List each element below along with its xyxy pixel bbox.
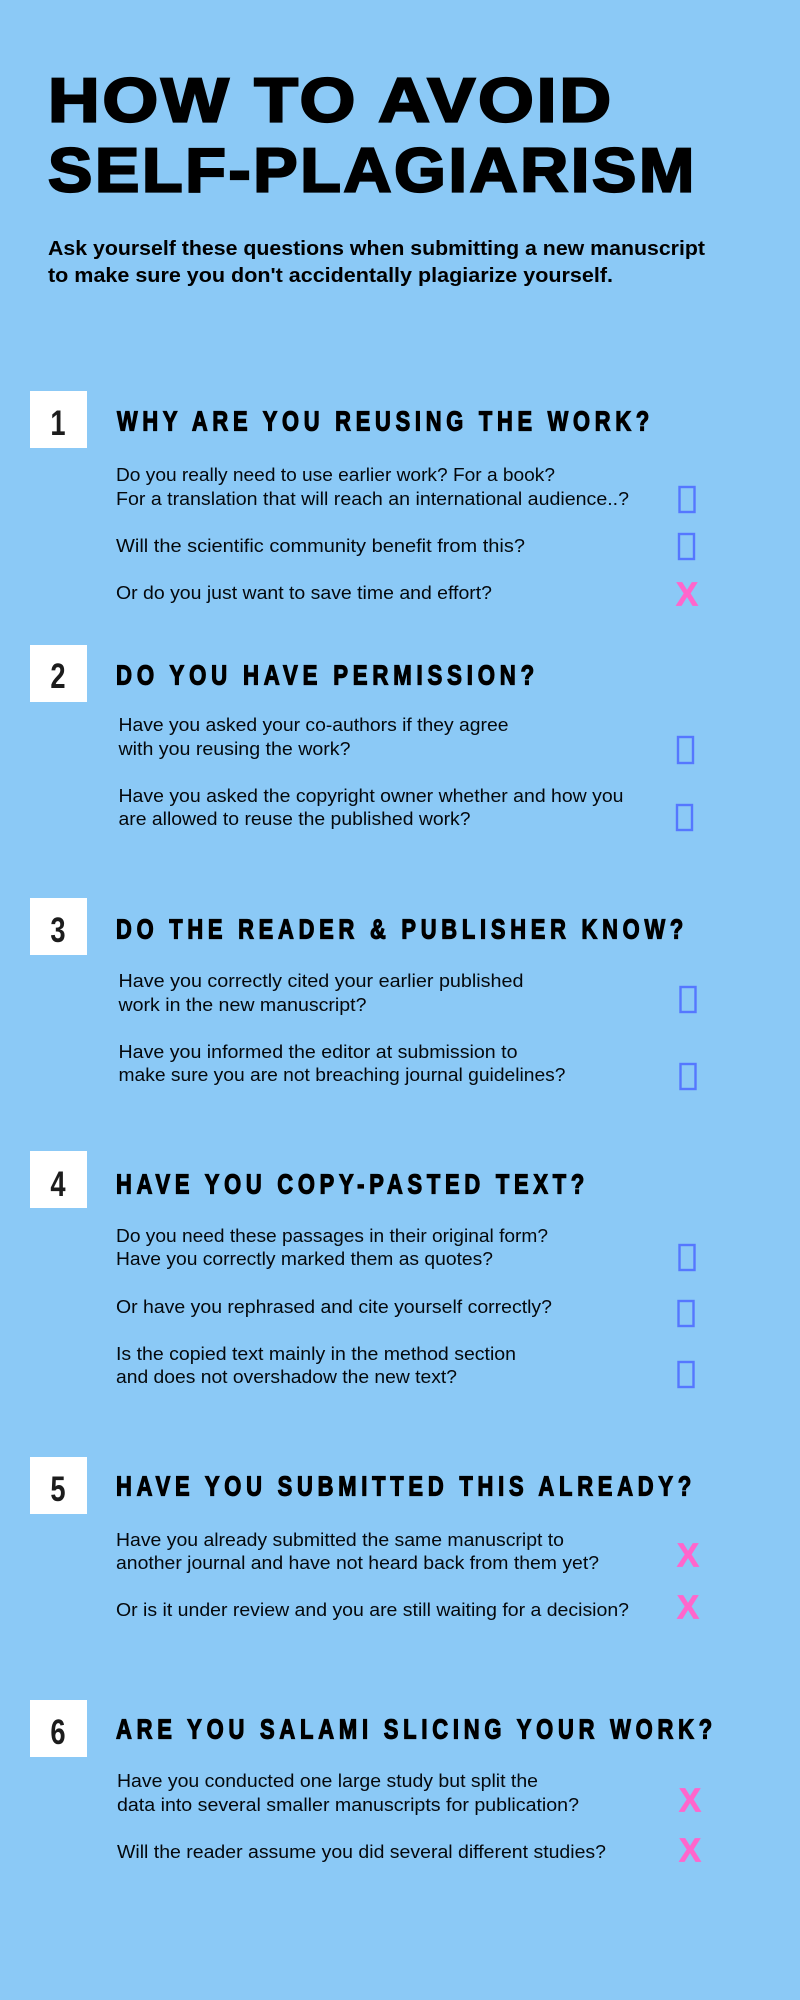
question 1a: For a translation that will reach an international audience..? bbox=[116, 488, 629, 509]
number badge 6 bbox=[30, 1700, 87, 1757]
number badge 1: 1 bbox=[50, 404, 66, 443]
icon: cross: X bbox=[679, 1782, 701, 1818]
icon: missing glyph box bbox=[678, 737, 693, 763]
question 1a: Do you really need to use earlier work? For a book? bbox=[116, 464, 555, 485]
question 2b: Have you asked the copyright owner whether and how you bbox=[118, 785, 624, 806]
subtitle bbox=[48, 237, 705, 287]
panel: section 5 bbox=[30, 1457, 699, 1626]
icon: missing glyph box bbox=[680, 1245, 694, 1270]
icon: missing glyph box bbox=[680, 487, 694, 512]
question 3b: Have you informed the editor at submission to bbox=[118, 1041, 518, 1062]
title: SELF-PLAGIARISM bbox=[48, 136, 697, 206]
question 2a: with you reusing the work? bbox=[117, 738, 350, 759]
question 5a: another journal and have not heard back from them yet? bbox=[116, 1552, 599, 1573]
subtitle: Ask yourself these questions when submitting a new manuscript bbox=[48, 237, 705, 260]
question 4c: and does not overshadow the new text? bbox=[116, 1366, 457, 1387]
question 4a: Do you need these passages in their original form? bbox=[116, 1225, 548, 1246]
icon: missing glyph box bbox=[677, 805, 692, 830]
question 4c: Is the copied text mainly in the method section bbox=[116, 1343, 516, 1364]
panel: section 3 bbox=[30, 898, 696, 1089]
title: HOW TO AVOID bbox=[48, 66, 614, 136]
question 3a: Have you correctly cited your earlier published bbox=[118, 970, 524, 991]
question 1c: Or do you just want to save time and effort? bbox=[116, 582, 492, 603]
question 4b: Or have you rephrased and cite yourself correctly? bbox=[116, 1296, 552, 1317]
question 2a: Have you asked your co-authors if they agree bbox=[118, 714, 508, 735]
panel: section 6 bbox=[30, 1700, 717, 1868]
panel: section 1 bbox=[30, 391, 698, 612]
question 3b: make sure you are not breaching journal guidelines? bbox=[118, 1064, 566, 1085]
number badge 2: 2 bbox=[50, 657, 66, 696]
icon: cross: X bbox=[676, 576, 698, 612]
question 5a bbox=[116, 1529, 599, 1573]
question 5a: Have you already submitted the same manuscript to bbox=[116, 1529, 564, 1550]
number badge 4: 4 bbox=[50, 1165, 66, 1204]
question 3a bbox=[117, 970, 523, 1015]
number badge 1 bbox=[30, 391, 87, 448]
question 6a: Have you conducted one large study but split the bbox=[117, 1770, 538, 1791]
icon: cross: X bbox=[677, 1588, 699, 1626]
question 1b: Will the scientific community benefit from this? bbox=[116, 535, 525, 556]
question 2a bbox=[117, 714, 508, 759]
question 4c bbox=[116, 1343, 516, 1387]
icon: missing glyph box bbox=[678, 1362, 694, 1387]
icon: cross: X bbox=[679, 1832, 701, 1868]
heading 2: DO YOU HAVE PERMISSION? bbox=[116, 660, 539, 690]
question 3b bbox=[118, 1041, 566, 1085]
panel: section 4 bbox=[30, 1151, 694, 1387]
question 4a bbox=[116, 1225, 548, 1269]
icon: missing glyph box bbox=[678, 1301, 694, 1326]
number badge 6: 6 bbox=[50, 1713, 66, 1752]
question 2b: are allowed to reuse the published work? bbox=[118, 808, 470, 829]
question 1a bbox=[116, 464, 629, 509]
number badge 5: 5 bbox=[50, 1470, 66, 1509]
heading 1: WHY ARE YOU REUSING THE WORK? bbox=[117, 406, 654, 436]
subtitle: to make sure you don't accidentally plagiarize yourself. bbox=[48, 264, 613, 287]
icon: missing glyph box bbox=[680, 987, 696, 1012]
question 3a: work in the new manuscript? bbox=[117, 994, 366, 1015]
icon: missing glyph box bbox=[679, 534, 694, 559]
question 5b: Or is it under review and you are still waiting for a decision? bbox=[116, 1599, 629, 1620]
number badge 4 bbox=[30, 1151, 87, 1208]
number badge 3: 3 bbox=[50, 911, 66, 950]
number badge 2 bbox=[30, 645, 87, 702]
heading 4: HAVE YOU COPY-PASTED TEXT? bbox=[116, 1168, 589, 1200]
question 6b: Will the reader assume you did several different studies? bbox=[117, 1841, 606, 1862]
question 6a bbox=[117, 1770, 579, 1815]
number badge 5 bbox=[30, 1457, 87, 1514]
number badge 3 bbox=[30, 898, 87, 955]
panel: section 2 bbox=[30, 645, 693, 830]
icon: missing glyph box bbox=[680, 1064, 696, 1089]
question 6a: data into several smaller manuscripts for publication? bbox=[117, 1794, 579, 1815]
question 2b bbox=[118, 785, 624, 829]
title bbox=[48, 66, 697, 206]
icon: cross: X bbox=[677, 1536, 699, 1574]
question 4a: Have you correctly marked them as quotes? bbox=[116, 1248, 493, 1269]
